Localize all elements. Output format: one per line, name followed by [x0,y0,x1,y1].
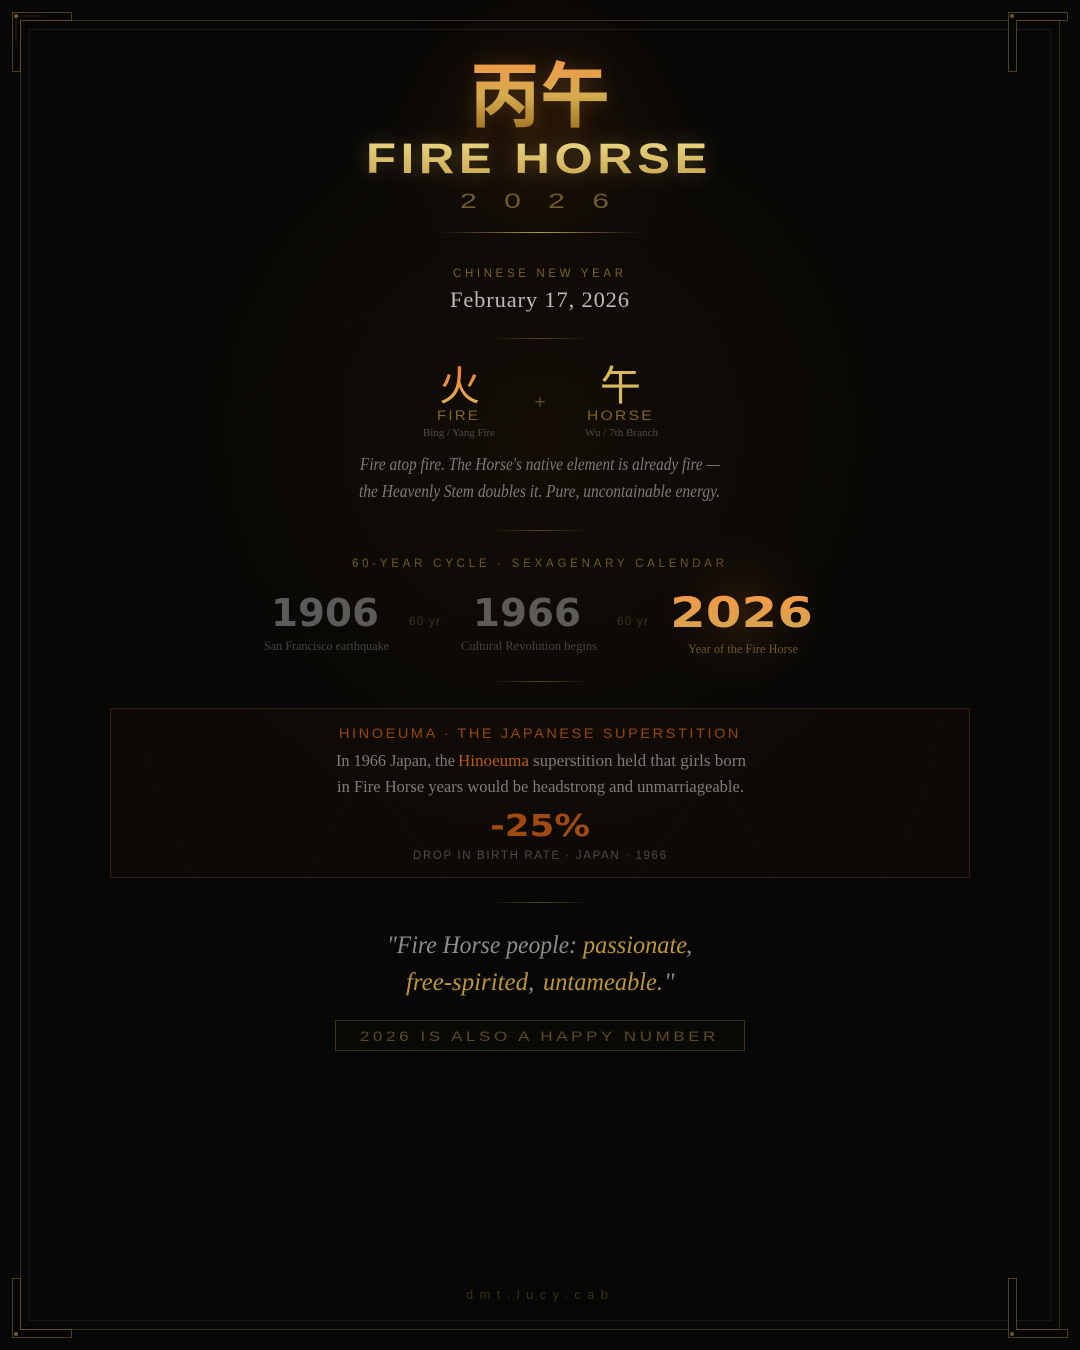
heading: FIRE HORSE: FIRE HORSE [366,136,712,183]
quote [387,932,692,996]
year 1966: Cultural Revolution begins [461,638,597,653]
icon: horse character: 午 [600,363,641,409]
quote: "Fire Horse people: [387,932,577,959]
description text: Fire atop fire. The Horse's native element is already fire — [359,454,721,474]
horse label: HORSE [587,408,654,423]
fire label: FIRE [437,408,480,423]
panel: Hinoeuma superstition [110,708,970,878]
title: 丙午: 丙午 [470,58,610,137]
plus sign: + [534,392,546,413]
fire note: Bing / Yang Fire [423,428,495,439]
description text [359,454,721,501]
year 2026 highlighted: Year of the Fire Horse [688,641,798,656]
quote: " [664,969,675,996]
statistic caption: DROP IN BIRTH RATE · JAPAN · 1966 [413,850,666,862]
heading: FIRE HORSE: FIRE HORSE [366,136,712,183]
heading: 60-year cycle: 60-YEAR CYCLE · SEXAGENARY CALENDAR [352,558,724,570]
title: 丙午: 丙午 [470,58,610,137]
panel body text: In 1966 Japan, the [336,751,455,770]
quote: , [528,969,534,996]
quote: free-spirited [406,969,528,996]
year 1906: 1906 [271,591,379,635]
year 2026 highlighted: 2026 [670,588,813,637]
divider [490,530,590,531]
icon: fire character: 火 [439,363,480,409]
panel body text: Hinoeuma [458,751,529,770]
badge: happy number: 2026 IS ALSO A HAPPY NUMBER [360,1028,719,1044]
year 1906: San Francisco earthquake [264,638,389,653]
statistic: -25%: -25% [490,809,590,844]
corner ornament: top right [1008,12,1068,72]
divider [490,681,590,682]
quote: , [686,932,692,959]
component: horse [585,363,659,439]
year 1966: 1966 [473,591,581,635]
panel body text: superstition held that girls born [533,751,746,770]
divider [490,338,590,339]
year: 2026: 2026 [460,190,609,213]
timeline: 60-year cycle [264,517,837,707]
year 1906 [264,591,389,653]
label: Chinese New Year: CHINESE NEW YEAR [453,268,623,280]
panel body text [336,751,746,796]
corner ornament: top left [12,12,72,72]
divider [440,232,640,233]
component: fire [423,363,495,439]
divider [490,902,590,903]
year 2026 highlighted [647,517,837,707]
interval label: 60 yr [617,614,648,628]
corner ornament: bottom right [1008,1278,1068,1338]
horse note: Wu / 7th Branch [585,428,659,439]
description text: the Heavenly Stem doubles it. Pure, uncontainable energy. [359,481,720,501]
quote: untameable. [543,969,663,996]
quote: passionate [581,932,687,959]
panel heading: HINOEUMA · THE JAPANESE SUPERSTITION [339,725,741,741]
date: February 17, 2026 [450,287,629,312]
footer: dmt.lucy.cab [466,1287,608,1302]
panel body text: in Fire Horse years would be headstrong and unmarriageable. [337,777,744,796]
corner ornament: bottom left [12,1278,72,1338]
year 1966 [461,591,597,653]
badge: happy number [336,1020,744,1050]
interval label: 60 yr [409,614,440,628]
